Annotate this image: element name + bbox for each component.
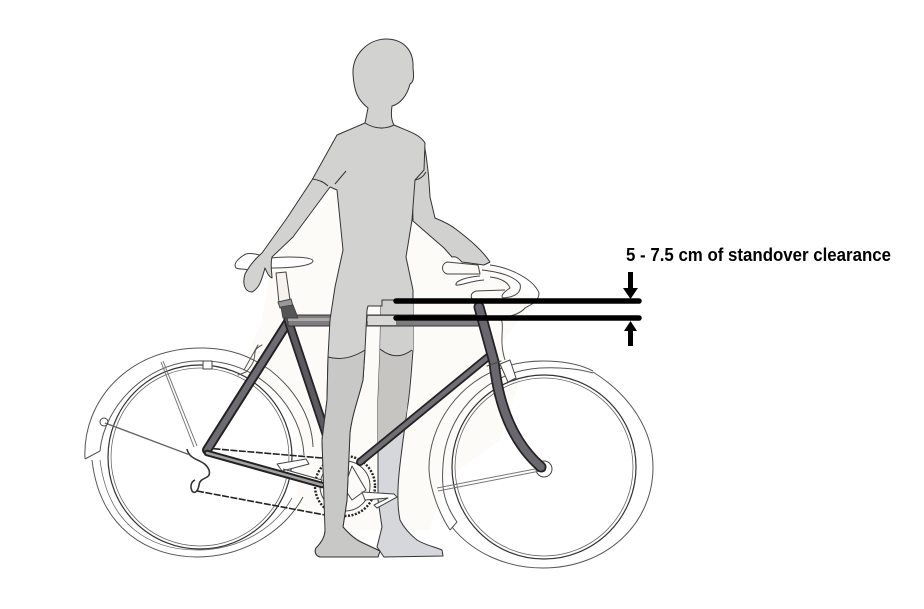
fork and head tube — [479, 307, 541, 467]
arrow: up — [624, 321, 637, 346]
handlebars — [442, 262, 539, 360]
chain — [197, 448, 325, 515]
front sock — [315, 350, 380, 557]
rear wheel — [85, 348, 313, 557]
paper tint behind figure — [240, 190, 535, 530]
back arm — [412, 143, 490, 265]
front body — [244, 39, 425, 557]
down tube — [360, 357, 488, 462]
sleeve and collar lines — [312, 123, 426, 186]
back leg — [377, 300, 443, 557]
lower clearance line — [396, 315, 639, 321]
chainring — [315, 456, 375, 516]
derailleur — [187, 449, 209, 492]
upper clearance line — [396, 298, 639, 304]
person silhouette — [244, 39, 490, 557]
saddle and seat post — [235, 253, 313, 318]
clearance label: 5 - 7.5 cm of standover clearance — [626, 245, 891, 265]
bicycle — [85, 253, 653, 568]
top tube — [288, 315, 482, 326]
arrow: down — [623, 272, 638, 299]
rear stays — [207, 322, 322, 485]
seat tube — [288, 320, 328, 440]
pedal and crank — [277, 459, 397, 508]
front wheel — [429, 361, 653, 568]
